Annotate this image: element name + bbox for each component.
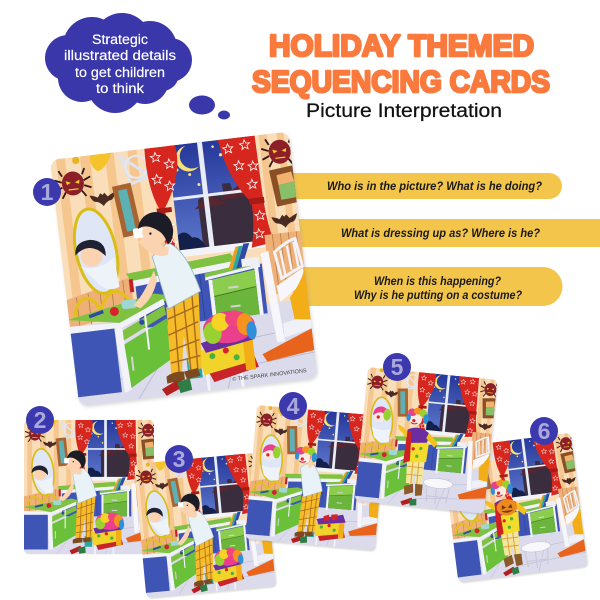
bubble text: to think: [96, 81, 144, 96]
question bar 3: Why is he putting on a costume?: [354, 288, 523, 302]
card 4: boy wearing wig: [246, 405, 380, 552]
badge 4: [279, 392, 307, 420]
bubble text: [64, 32, 176, 96]
badge 6: 6: [538, 418, 550, 444]
card 1: boy at mirror: [48, 131, 326, 420]
thought bubble callout: [45, 13, 230, 120]
badge 1: [33, 178, 61, 206]
badge 5: [383, 353, 411, 381]
thought bubble dots: [189, 96, 230, 120]
subtitle: Picture Interpretation: [306, 100, 502, 122]
badge 4: 4: [287, 393, 300, 419]
headline: holiday themed: HOLIDAY THEMED: [269, 28, 534, 63]
card 5: clown dressed: [353, 367, 501, 516]
card 1: boy at mirror: © THE SPARK INNOVATIONS: [232, 367, 307, 383]
question bar 1: [280, 173, 562, 199]
badge 1: 1: [41, 179, 54, 205]
bubble text: to get children: [75, 65, 165, 80]
badge 2: [26, 406, 54, 434]
bubble text: illustrated details: [64, 48, 176, 63]
card 6: clown with pumpkin: [441, 432, 591, 584]
card 2: boy applying makeup: [23, 420, 158, 562]
headline: sequencing cards: SEQUENCING CARDS: [252, 64, 550, 99]
card 3: boy applying lipstick: [133, 452, 280, 600]
bubble text: Strategic: [92, 32, 148, 47]
badge 2: 2: [34, 407, 46, 433]
question bar 3: When is this happening?: [374, 274, 502, 288]
question bar 2: [280, 219, 600, 247]
question bar 3: [280, 267, 562, 306]
question bar 1: Who is in the picture? What is he doing?: [327, 179, 543, 193]
badge 3: 3: [173, 446, 185, 472]
badge 3: [165, 445, 193, 473]
question bar 2: What is dressing up as? Where is he?: [341, 226, 541, 240]
badge 6: [530, 417, 558, 445]
badge 5: 5: [391, 354, 404, 380]
